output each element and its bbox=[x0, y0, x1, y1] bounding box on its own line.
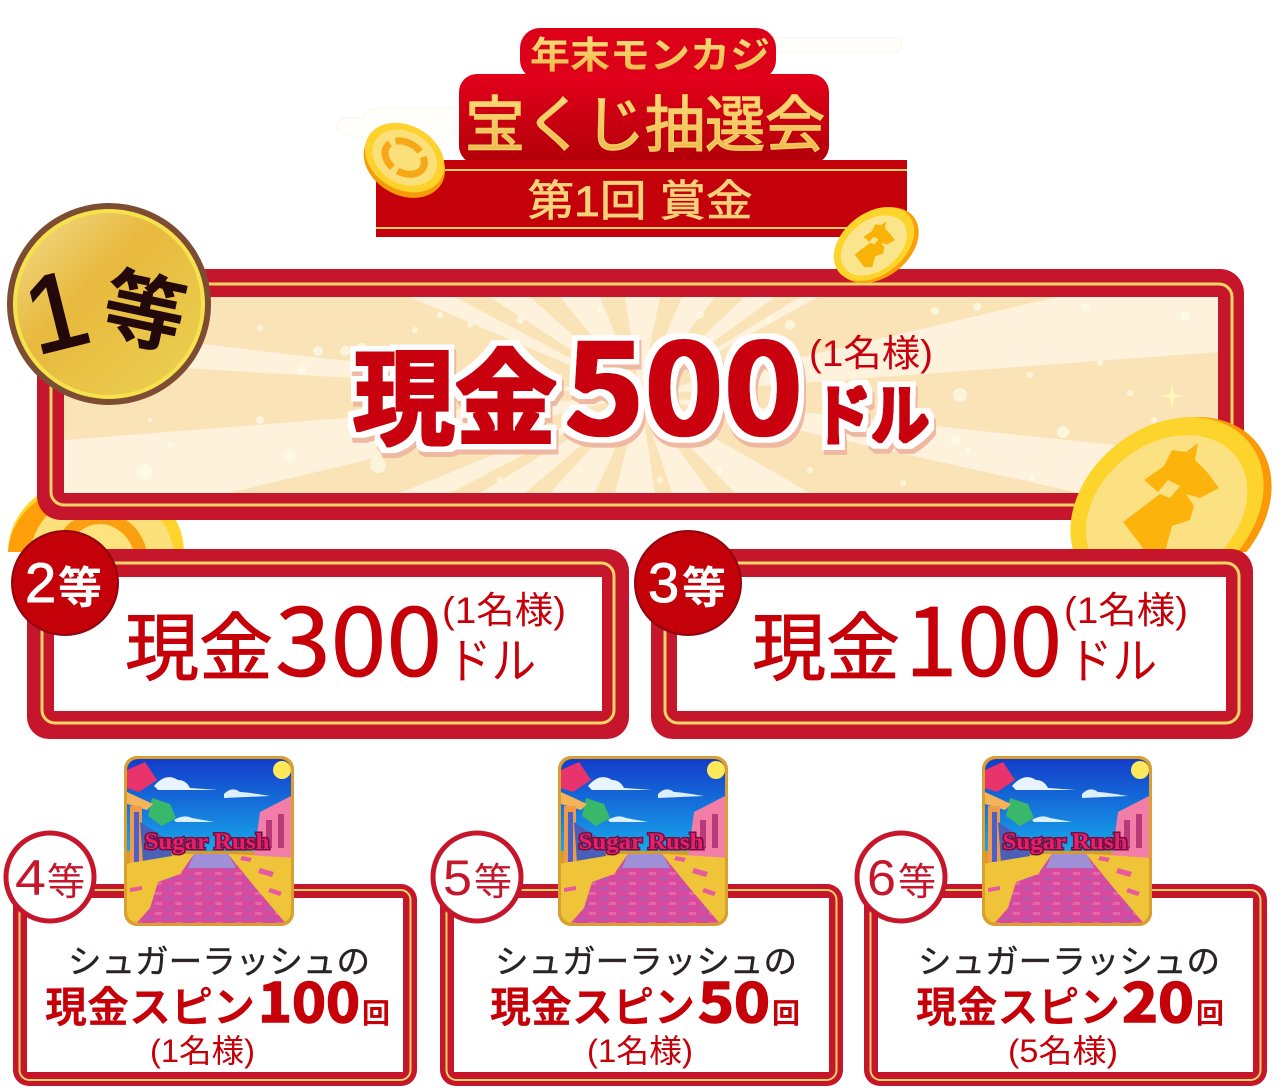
prize text: (1名様) bbox=[442, 590, 566, 631]
text: cash spins bbox=[916, 959, 1224, 1038]
text: cash spins: 50 bbox=[698, 959, 770, 1038]
decorative clouds bbox=[336, 38, 902, 136]
coin: top right bbox=[819, 190, 933, 299]
coin: large right bbox=[1070, 417, 1272, 552]
frame bbox=[440, 884, 843, 1086]
text: cash spins: 20 bbox=[1122, 959, 1194, 1038]
text: sugar rush: シュガーラッシュの bbox=[918, 935, 1220, 983]
badge: 2nd bbox=[12, 531, 118, 635]
text: cash spins bbox=[490, 959, 800, 1038]
badge: 3rd bbox=[635, 531, 741, 635]
text: cash spins: 現金スピン bbox=[916, 974, 1120, 1035]
title: year-end Monkajii: 年末モンカジ bbox=[530, 25, 770, 79]
sunburst background bbox=[64, 297, 1218, 493]
badge: 5th: 5 bbox=[443, 850, 472, 906]
badge: 2nd: 等 bbox=[58, 552, 102, 616]
prize text: 300 bbox=[275, 568, 442, 704]
badge: 3rd: 等 bbox=[682, 552, 726, 616]
prize text: 現金 bbox=[125, 589, 273, 696]
frame bbox=[864, 884, 1267, 1086]
panel: 4th prize bbox=[6, 756, 417, 1086]
frame bbox=[27, 549, 629, 739]
game thumbnail: Sugar Rush bbox=[578, 829, 704, 854]
game thumbnail bbox=[124, 756, 294, 926]
title backing bbox=[459, 28, 829, 164]
frame bbox=[651, 549, 1253, 739]
panel: 3rd prize bbox=[635, 531, 1253, 739]
text: sugar rush: シュガーラッシュの bbox=[495, 935, 797, 983]
text: cash 500: ドル bbox=[813, 363, 929, 459]
badge: 1st prize medal: 等 bbox=[93, 239, 198, 373]
game thumbnail bbox=[982, 756, 1152, 926]
prize text: (1名様) bbox=[1064, 590, 1188, 631]
badge: 6th bbox=[857, 833, 945, 921]
prize text bbox=[125, 568, 566, 704]
prize text: ドル bbox=[1068, 622, 1157, 693]
sparkle bbox=[1158, 382, 1186, 410]
title bbox=[376, 25, 907, 237]
frame bbox=[37, 269, 1244, 520]
badge: 6th: 6 bbox=[867, 850, 896, 906]
game thumbnail: Sugar Rush bbox=[1002, 829, 1128, 854]
text: cash spins: 現金スピン bbox=[45, 974, 255, 1035]
badge: 4th: 等 bbox=[47, 851, 85, 906]
frame bbox=[13, 884, 417, 1086]
coin: left behind frame bbox=[8, 496, 184, 552]
text: cash spins: 現金スピン bbox=[490, 974, 695, 1035]
badge: 1st prize medal bbox=[7, 203, 211, 405]
prize text: ドル bbox=[447, 622, 536, 693]
badge: 5th: 等 bbox=[474, 851, 512, 906]
game thumbnail: Sugar Rush bbox=[144, 829, 270, 854]
text: cash spins: 回 bbox=[772, 992, 800, 1032]
text: cash 500: 500 bbox=[565, 290, 803, 470]
text: cash spins: 100 bbox=[258, 959, 360, 1038]
prize text bbox=[752, 568, 1188, 704]
badge: 3rd: 3 bbox=[648, 551, 679, 614]
game thumbnail bbox=[558, 756, 728, 926]
panel: 5th prize bbox=[433, 756, 843, 1086]
text: cash spins bbox=[45, 959, 390, 1038]
panel: 6th prize bbox=[857, 756, 1267, 1086]
text: cash spins: 回 bbox=[1196, 992, 1224, 1032]
panel: 1st prize bbox=[37, 269, 1244, 520]
title: lottery: 宝くじ抽選会 bbox=[465, 75, 825, 164]
badge: 1st prize medal: 1 bbox=[12, 245, 100, 377]
text: winners: (5名様) bbox=[1008, 1033, 1118, 1069]
badge: 2nd: 2 bbox=[25, 551, 56, 614]
text: 1 winner: (1名様) bbox=[809, 333, 933, 374]
prize text: 100 bbox=[905, 568, 1062, 704]
badge: 4th: 4 bbox=[15, 850, 46, 906]
text: cash 500 bbox=[353, 290, 929, 470]
text: cash 500: 現金 bbox=[353, 315, 557, 466]
text: winners: (1名様) bbox=[587, 1033, 693, 1069]
badge: 5th bbox=[433, 833, 521, 921]
ribbon bbox=[376, 160, 907, 237]
subtitle: 第1回 賞金 bbox=[528, 178, 752, 226]
panel: 2nd prize bbox=[12, 531, 629, 739]
badge: 4th bbox=[6, 833, 94, 921]
text: sugar rush: シュガーラッシュの bbox=[68, 935, 370, 983]
text: winners: (1名様) bbox=[150, 1033, 255, 1069]
text: cash spins: 回 bbox=[362, 992, 390, 1032]
badge: 6th: 等 bbox=[898, 851, 936, 906]
prize text: 現金 bbox=[752, 589, 900, 696]
coin: top left bbox=[350, 109, 460, 212]
